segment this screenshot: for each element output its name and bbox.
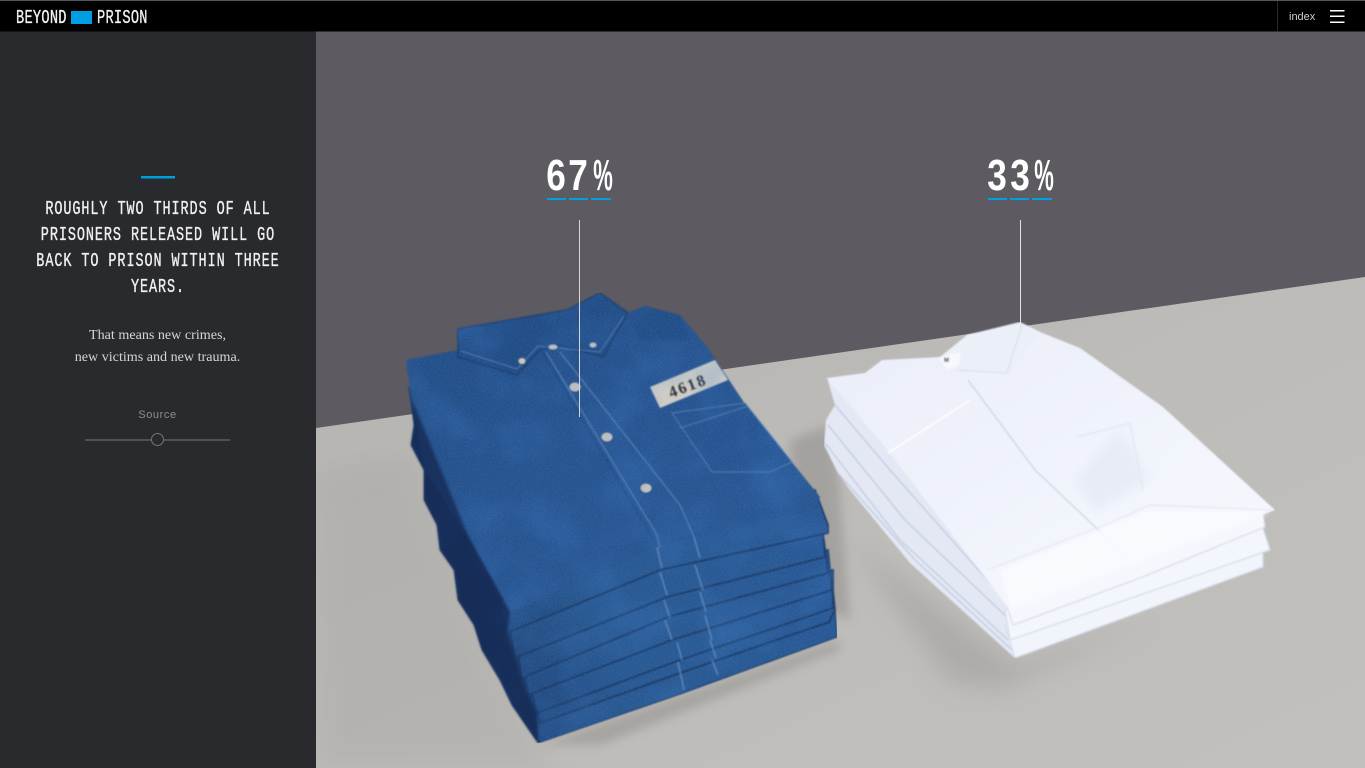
panel: sidebar [0,31,316,768]
stat: 33%: 3 [1010,151,1030,200]
subtext: That means new crimes, [89,327,226,343]
pointer line: 67% [579,220,580,417]
table [316,277,1365,768]
prisoner number label [650,360,728,408]
heading: YEARS. [131,276,185,298]
wall [316,31,1365,451]
stat: 33%: % [1034,152,1054,200]
white shirt neck tag: M [944,358,949,364]
heading: BACK TO PRISON WITHIN THREE [36,250,280,272]
denim collar [456,293,629,376]
stat: 33% [987,151,1054,200]
heading [36,198,280,298]
stat: 67%: 6 [546,151,566,200]
accent dash [141,176,175,178]
denim shirt stack [406,293,837,743]
heading: ROUGHLY TWO THIRDS OF ALL [45,198,271,220]
white stack side [824,378,1030,658]
white shirt creases [888,380,1272,570]
pointer line: 33% [1020,220,1021,325]
index divider [1277,1,1278,31]
subtext [75,327,240,365]
white shirt stack [824,322,1275,658]
source slider [85,434,230,446]
stat: 67% [546,151,613,200]
white shirt neck tag [940,353,960,369]
index link: index [1289,11,1316,23]
denim folded layers [500,490,837,743]
denim placket [543,352,718,690]
logo [16,7,148,29]
table shadows [333,426,1042,755]
stat: 67%: 7 [568,151,588,200]
denim stack side [408,386,538,742]
logo: PRISON [97,7,148,29]
denim top shirt [406,293,820,612]
logo: BEYOND [16,7,67,29]
denim seams on stack [657,537,718,690]
white folded layers [1005,505,1270,658]
header bar [0,0,1365,32]
icon: hamburger menu [1330,10,1344,23]
stat: 33%: 3 [987,151,1007,200]
white shirt collar [958,325,1022,374]
subtext: new victims and new trauma. [75,349,240,365]
heading: PRISONERS RELEASED WILL GO [41,224,275,246]
denim buttons [518,342,652,493]
photo: folded shirts on a table [316,31,1365,768]
white top shirt [827,322,1275,610]
prisoner number label: 4618 [666,372,710,402]
denim stack dark side shading [411,400,538,743]
source label: Source [138,409,177,421]
stat: 67%: % [593,152,613,200]
denim pocket [672,403,792,472]
white side fold lines [825,405,1012,650]
